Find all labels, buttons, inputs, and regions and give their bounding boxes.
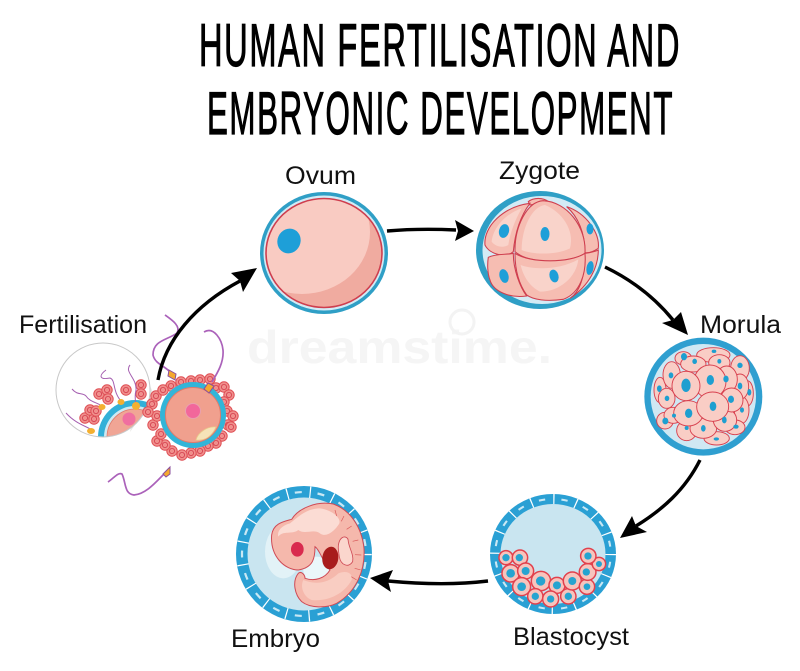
inset magnifier — [56, 342, 152, 438]
arrow: blastocyst to embryo — [370, 570, 488, 592]
arrow: morula to blastocyst — [620, 460, 700, 538]
arrow: zygote to morula — [605, 267, 688, 335]
icon: morula — [644, 338, 762, 456]
label: Zygote: Zygote — [499, 157, 580, 185]
icon: ovum — [260, 192, 388, 314]
label: Embryo: Embryo — [231, 625, 320, 653]
watermark: dreamstime. — [247, 321, 552, 373]
icon: blastocyst — [490, 494, 616, 614]
egg — [160, 382, 226, 448]
corona cells — [143, 374, 238, 460]
arrow: fertilisation to ovum — [158, 268, 257, 380]
label: Morula: Morula — [700, 311, 781, 339]
title — [199, 12, 681, 147]
icon: fertilisation stage — [56, 315, 238, 495]
sperm cells — [108, 315, 223, 495]
blastocyst inner cells — [499, 548, 606, 607]
icon: zygote — [476, 191, 604, 309]
icon: embryo — [236, 486, 372, 622]
label: Blastocyst: Blastocyst — [513, 623, 629, 651]
label: Fertilisation: Fertilisation — [19, 311, 147, 339]
label: Ovum: Ovum — [285, 162, 356, 190]
arrow: ovum to zygote — [387, 220, 474, 241]
